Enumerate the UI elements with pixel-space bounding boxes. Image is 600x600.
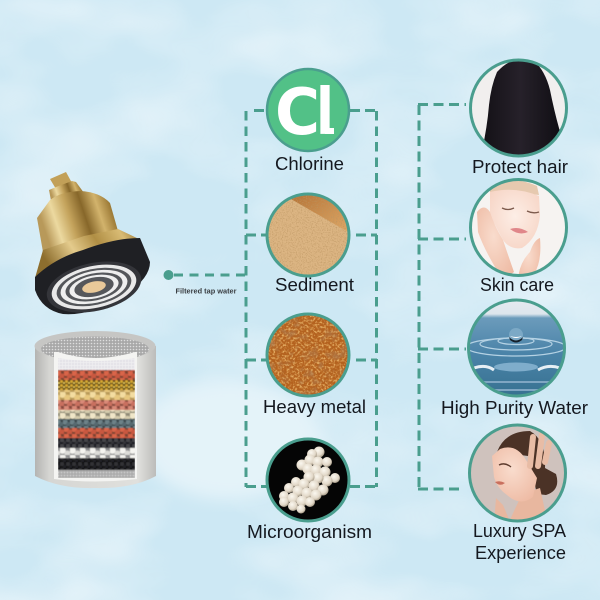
photo: woman touching hair xyxy=(471,426,564,520)
icon: chlorine circle: l xyxy=(316,76,334,150)
skin care item xyxy=(470,179,567,295)
photo: hair xyxy=(472,62,565,154)
icon: chlorine circle: C xyxy=(275,76,320,150)
black ring xyxy=(35,238,150,314)
connector: tap water to impurities xyxy=(164,110,378,487)
photo: face and hands xyxy=(472,181,565,274)
ring xyxy=(470,180,566,276)
icon: chlorine circle xyxy=(267,69,349,151)
connector: benefits xyxy=(418,104,466,489)
chlorine item xyxy=(267,69,349,174)
label: luxury spa experience xyxy=(473,520,567,563)
ring xyxy=(470,425,566,521)
label: filtered tap water: Filtered tap water xyxy=(176,288,237,296)
ring xyxy=(470,60,566,156)
body xyxy=(37,191,118,252)
shell xyxy=(35,346,156,488)
label: chlorine: Chlorine xyxy=(275,153,344,174)
ring xyxy=(267,439,349,521)
label: microorganism: Microorganism xyxy=(247,521,372,542)
label: sediment: Sediment xyxy=(275,274,354,295)
heavy metal item xyxy=(263,313,366,417)
luxury spa item xyxy=(468,424,568,563)
ring xyxy=(468,300,564,396)
label: protect hair: Protect hair xyxy=(472,156,568,177)
icon: bacteria cluster xyxy=(268,440,348,520)
ring xyxy=(267,314,349,396)
icon: rust xyxy=(268,316,348,394)
label: luxury spa experience: Luxury SPA xyxy=(473,520,567,541)
shower head xyxy=(35,172,150,320)
label: heavy metal: Heavy metal xyxy=(263,396,366,417)
sediment item xyxy=(266,190,354,295)
icon: sand xyxy=(268,196,348,274)
photo: water drop xyxy=(470,302,563,394)
ring xyxy=(267,194,349,276)
protect hair item xyxy=(470,60,568,177)
label: high purity water: High Purity Water xyxy=(441,397,588,418)
rings face xyxy=(42,254,146,320)
label: skin care: Skin care xyxy=(480,274,554,295)
neck xyxy=(49,172,84,206)
cutaway interior xyxy=(54,352,137,482)
microorganism item xyxy=(247,438,372,542)
filter cartridge cutaway xyxy=(34,331,156,488)
high purity water item xyxy=(441,299,588,418)
mineral layers xyxy=(58,352,135,478)
label: luxury spa experience: Experience xyxy=(475,542,566,563)
